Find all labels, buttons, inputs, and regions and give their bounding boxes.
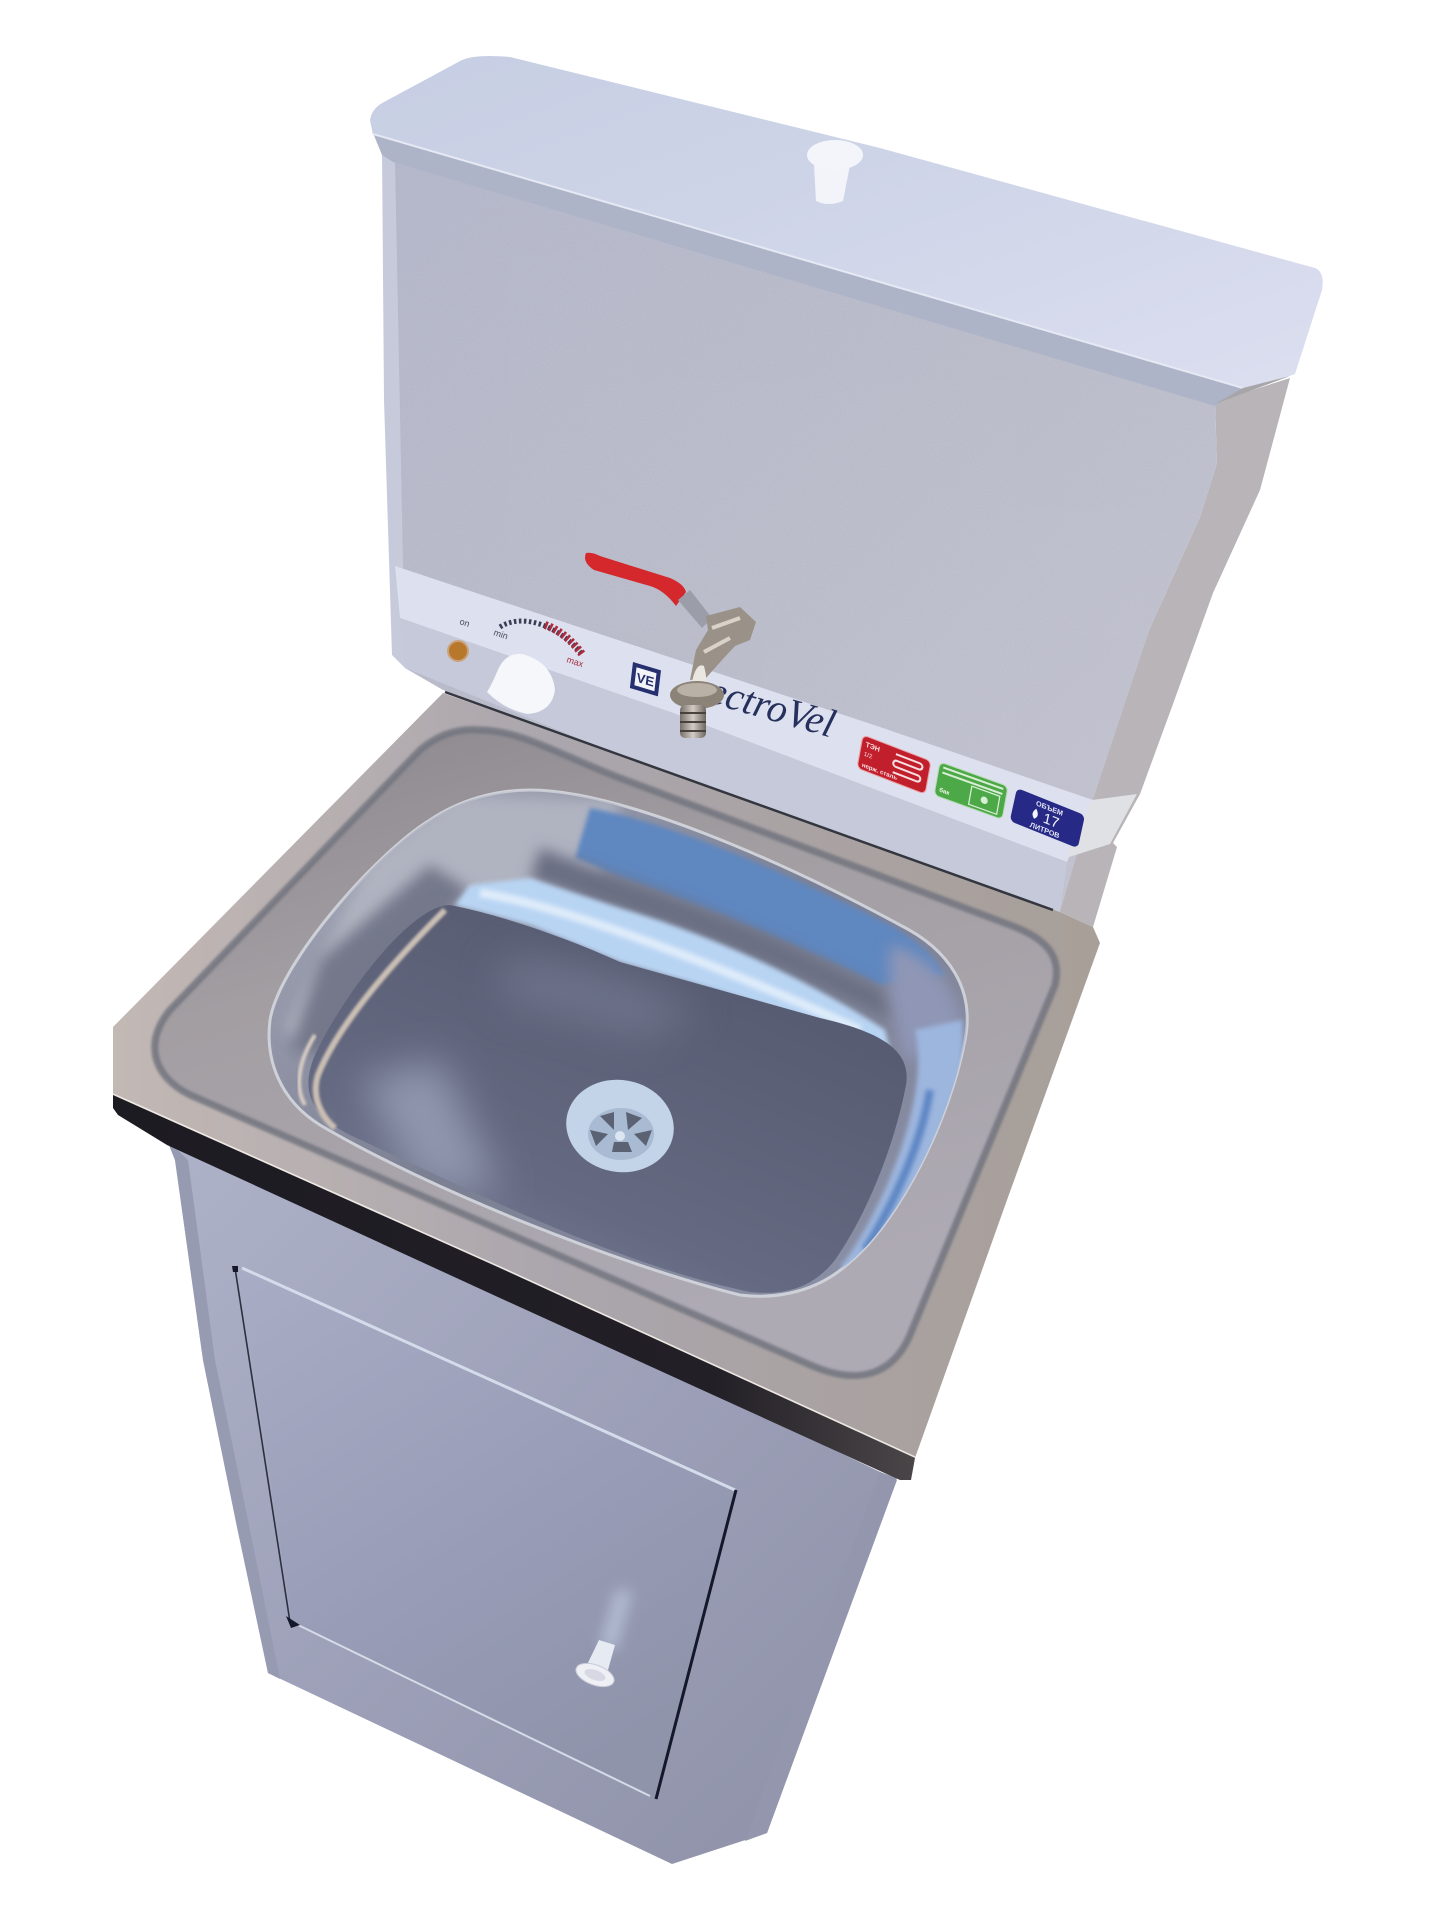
brand logo xyxy=(630,662,661,696)
drain xyxy=(559,1071,681,1181)
badge: heater: 1/2 xyxy=(863,751,873,761)
temperature dial scale xyxy=(500,621,582,654)
power indicator xyxy=(448,641,468,661)
brand name: ElectroVel xyxy=(669,657,841,746)
countertop with sink xyxy=(113,693,1100,1480)
basin floor xyxy=(308,905,907,1293)
rim groove xyxy=(155,730,1057,1375)
badge: volume: ЛИТРОВ xyxy=(1029,820,1060,840)
valve body xyxy=(690,607,756,680)
dial labels: max xyxy=(565,654,585,669)
light highlight band xyxy=(455,878,890,1050)
door knob xyxy=(573,1590,632,1691)
badge: tank: бак xyxy=(939,787,951,797)
cabinet door xyxy=(232,1266,736,1799)
dial labels: on xyxy=(458,616,471,629)
tank lid xyxy=(370,56,1323,406)
dial labels: min xyxy=(492,627,509,641)
badge: volume xyxy=(1010,788,1085,848)
tank front panel xyxy=(382,150,1217,912)
nut xyxy=(670,681,724,709)
counter panel xyxy=(113,693,1100,1458)
dial labels xyxy=(458,616,585,669)
temperature knob xyxy=(487,654,555,714)
reflection: blue wall xyxy=(575,808,945,985)
tank side panel xyxy=(1060,378,1290,927)
brand logo: VE xyxy=(636,670,655,690)
tape on corner xyxy=(1066,794,1137,858)
badge: tank xyxy=(934,762,1008,819)
basin bowl xyxy=(269,790,967,1296)
red lever xyxy=(585,553,686,606)
badge: heater: нерж. сталь xyxy=(861,762,898,782)
lever arm xyxy=(678,590,712,628)
right wall lavender xyxy=(890,945,963,1060)
cabinet base xyxy=(167,1140,897,1864)
faucet xyxy=(585,553,756,738)
badge: volume: ОБЪЕМ xyxy=(1035,799,1064,818)
product illustration: washstand with water tank xyxy=(113,56,1323,1864)
badge: heater xyxy=(857,735,931,794)
label strip xyxy=(395,566,1137,912)
hose barb xyxy=(680,705,706,738)
ledge xyxy=(530,848,890,1020)
badge: heater: ТЭН xyxy=(865,740,881,754)
seam under tank xyxy=(445,692,1053,910)
black front edge xyxy=(113,1095,915,1480)
water tank xyxy=(370,56,1323,927)
badge: volume: 17 xyxy=(1042,811,1060,832)
lid knob xyxy=(807,140,863,204)
